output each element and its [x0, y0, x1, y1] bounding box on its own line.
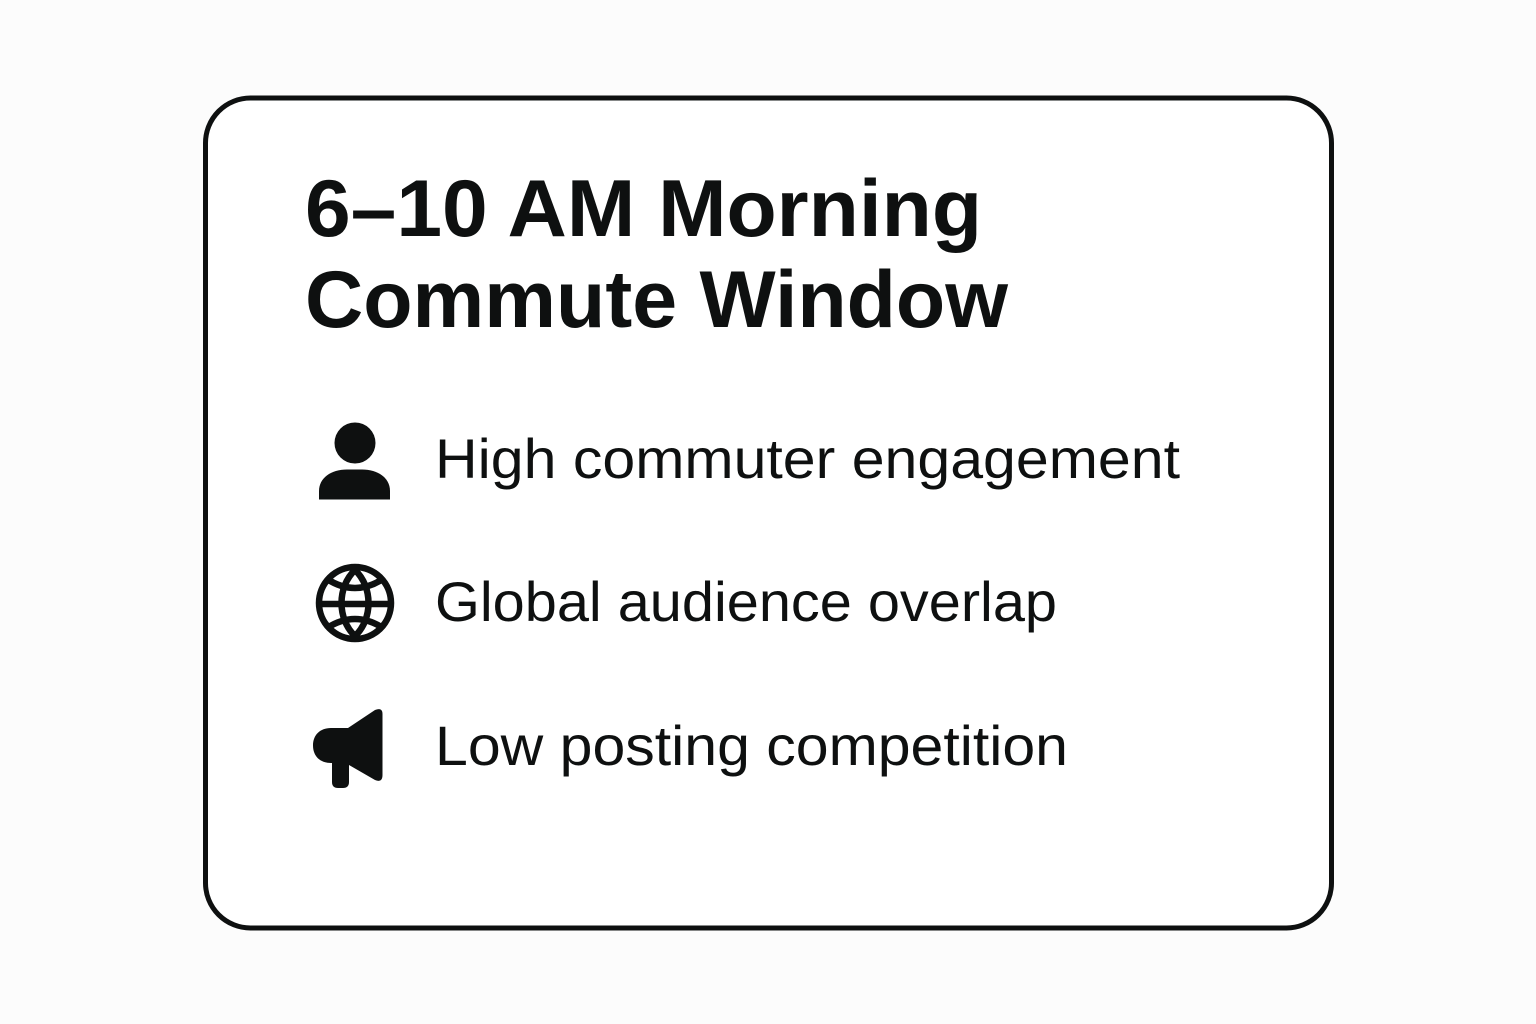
- item: low posting competition: [313, 709, 1068, 788]
- text: high commuter engagement: High commuter engagement: [435, 427, 1180, 490]
- icon: globe: [319, 567, 391, 639]
- panel: card: [206, 98, 1332, 928]
- heading: title: 6–10 AM Morning: [305, 164, 982, 254]
- text: low posting competition: Low posting competition: [435, 714, 1068, 777]
- item: global audience overlap: [319, 567, 1057, 639]
- item: high commuter engagement: [319, 422, 1180, 500]
- icon: person: [319, 422, 390, 500]
- heading: title: [305, 164, 1009, 345]
- icon: megaphone: [313, 709, 382, 788]
- text: global audience overlap: Global audience overlap: [435, 570, 1057, 633]
- heading: title: Commute Window: [305, 255, 1009, 345]
